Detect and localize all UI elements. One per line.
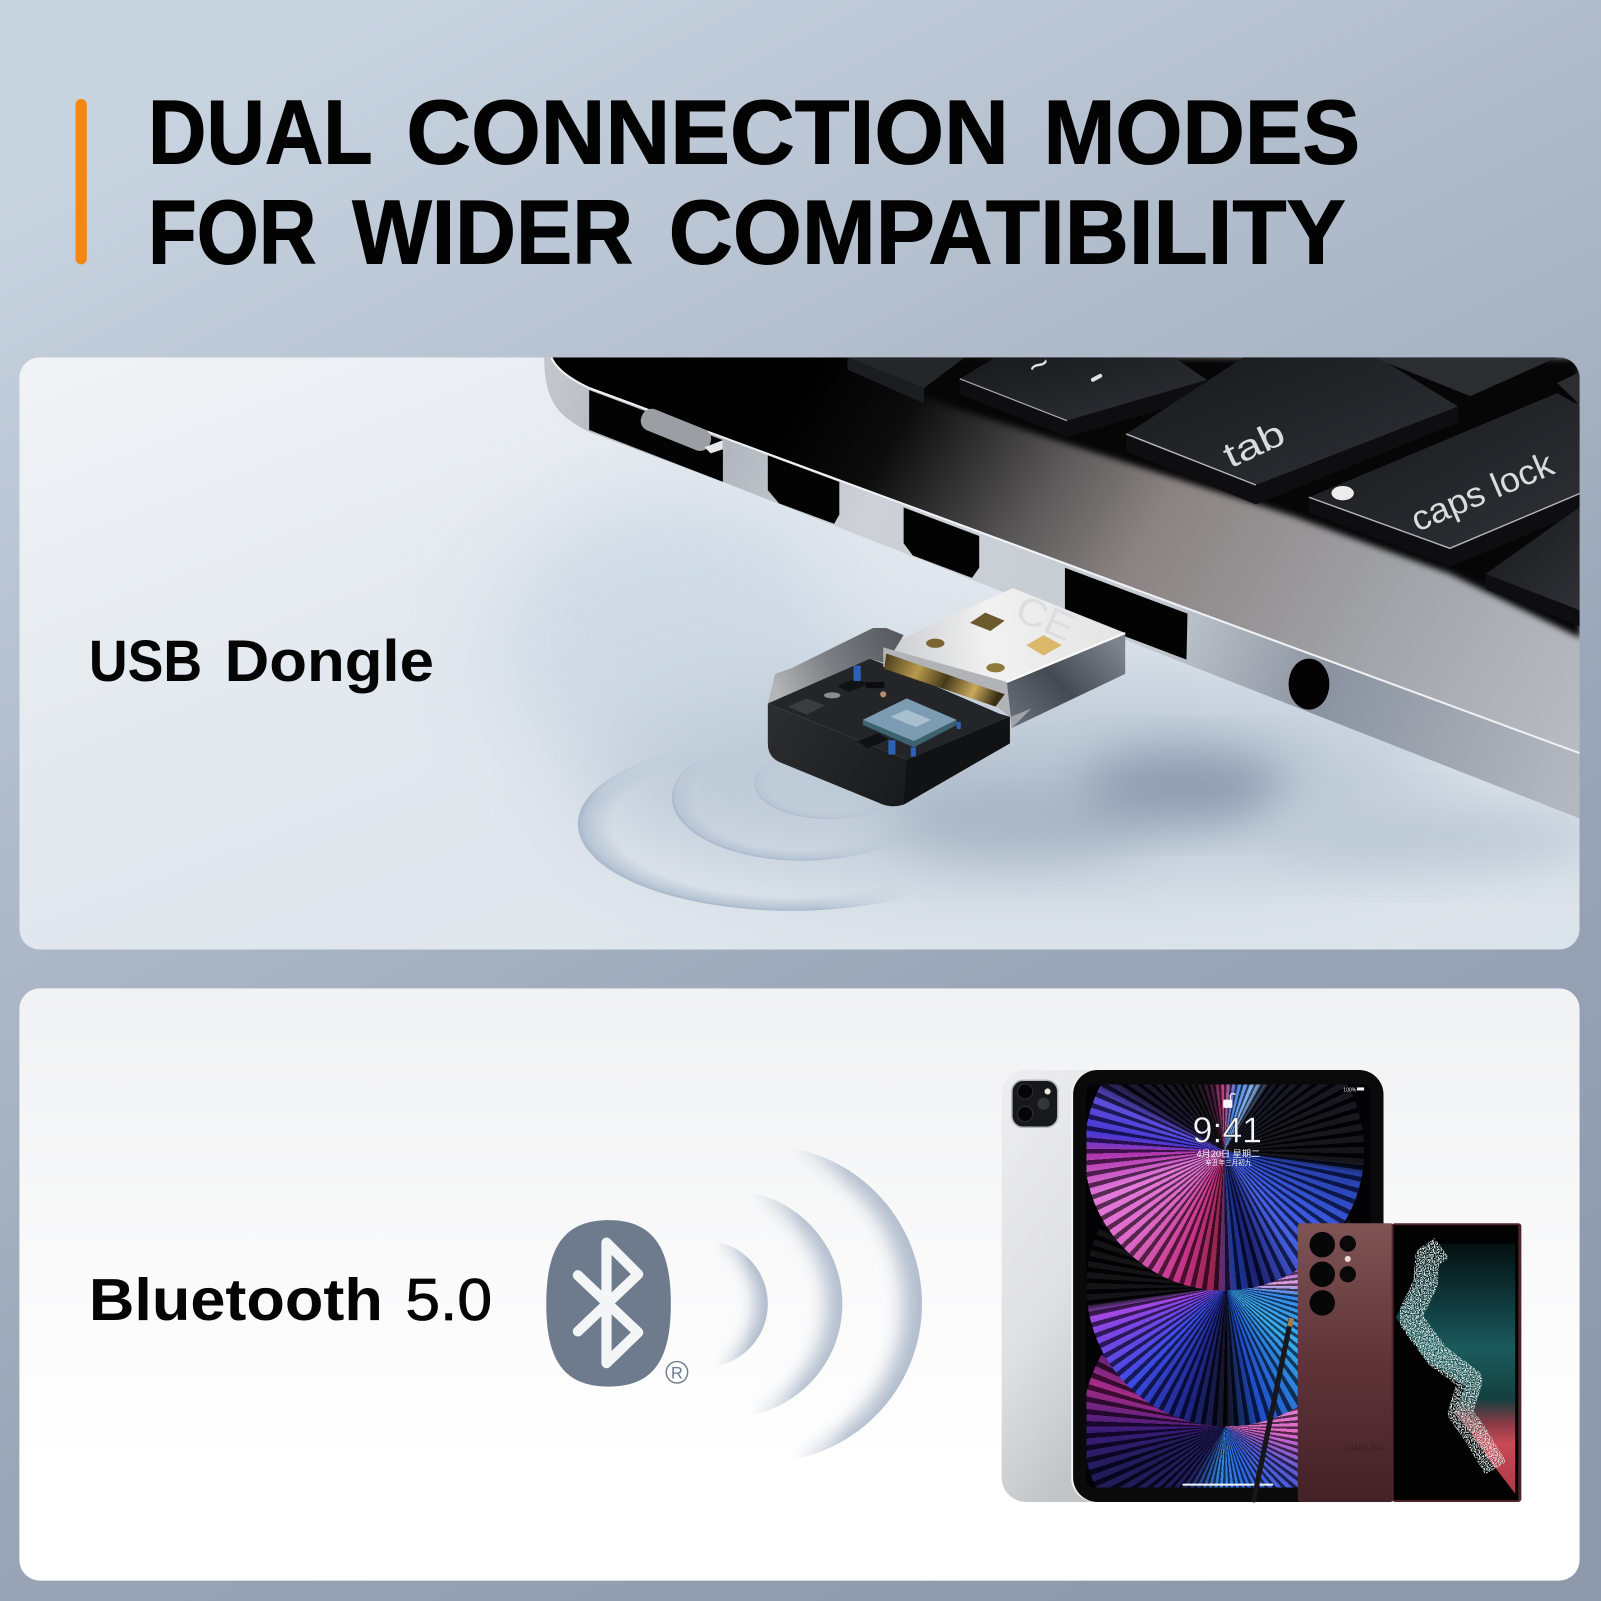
label: USB Dongle bbox=[92, 638, 432, 694]
label: Bluetooth 5.0: 5.0 bbox=[405, 1266, 492, 1333]
key labels: tab bbox=[1217, 413, 1291, 476]
stylus bbox=[1254, 1318, 1292, 1500]
keyboard keys bbox=[847, 357, 1581, 627]
accent bar bbox=[76, 99, 87, 264]
panel: USB dongle bbox=[19, 344, 1601, 950]
laptop ports bbox=[589, 390, 1329, 710]
lock screen text: 9:41 bbox=[1193, 1111, 1262, 1151]
phone back bbox=[1298, 1223, 1394, 1502]
signal arcs bbox=[720, 1150, 922, 1458]
phone back: SAMSUNG bbox=[1344, 1443, 1385, 1453]
title: FOR bbox=[148, 182, 317, 283]
panel: Bluetooth bbox=[19, 988, 1580, 1581]
label: USB Dongle: Dongle bbox=[225, 629, 434, 694]
title: COMPATIBILITY bbox=[669, 182, 1346, 283]
title: DUAL bbox=[148, 82, 373, 183]
icon: Bluetooth logo: R bbox=[671, 1364, 683, 1382]
signal rings bbox=[578, 766, 888, 911]
icon: Bluetooth logo bbox=[546, 1220, 688, 1387]
lock screen text: 辛丑年三月初九 bbox=[1205, 1158, 1252, 1167]
phone front bbox=[1392, 1223, 1521, 1502]
title: MODES bbox=[1044, 82, 1360, 183]
USB dongle: CE bbox=[1009, 587, 1081, 650]
lock screen text: 4月20日 星期二 bbox=[1196, 1149, 1260, 1159]
metal plug collar bbox=[883, 647, 1011, 717]
tablet back bbox=[1002, 1070, 1124, 1502]
lock screen text: 100% bbox=[1343, 1087, 1357, 1093]
key labels: ~ bbox=[1021, 344, 1057, 387]
title bbox=[148, 82, 1360, 283]
key labels bbox=[1031, 359, 1556, 530]
USB dongle bbox=[768, 587, 1125, 806]
label: Bluetooth 5.0 bbox=[89, 1266, 492, 1333]
title: CONNECTION bbox=[406, 82, 1009, 183]
title: WIDER bbox=[352, 182, 633, 283]
label: USB Dongle: USB bbox=[89, 629, 202, 694]
PCB chip bbox=[788, 666, 961, 757]
tablet front bbox=[1071, 1070, 1384, 1502]
label: Bluetooth 5.0: Bluetooth bbox=[89, 1266, 383, 1333]
lock screen text bbox=[1182, 1087, 1364, 1486]
laptop bbox=[544, 344, 1581, 819]
key labels: caps lock bbox=[1405, 445, 1560, 539]
